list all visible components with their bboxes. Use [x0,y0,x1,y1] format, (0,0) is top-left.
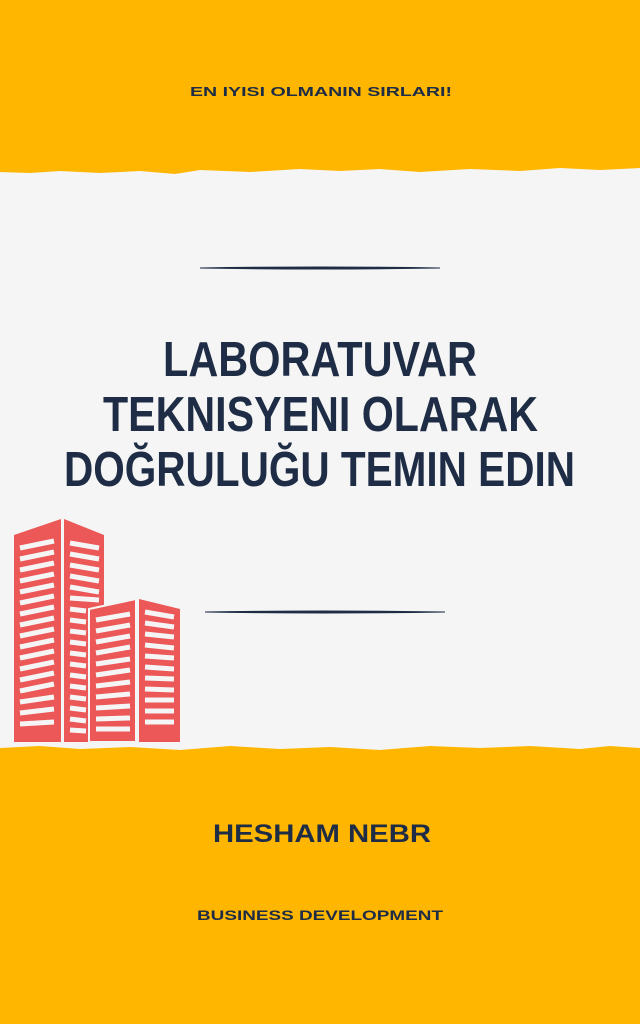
subtitle: BUSINESS DEVELOPMENT [197,907,444,923]
top divider [200,267,440,269]
title: TEKNISYENI OLARAK [103,388,538,442]
title: LABORATUVAR [163,333,477,387]
top yellow band [0,0,640,174]
author name: HESHAM NEBR [213,820,431,848]
bottom yellow band [0,746,640,1024]
title [64,333,575,497]
bottom divider [205,611,445,613]
icon: buildings [14,519,180,742]
top tagline: EN IYISI OLMANIN SIRLARI! [190,84,452,99]
